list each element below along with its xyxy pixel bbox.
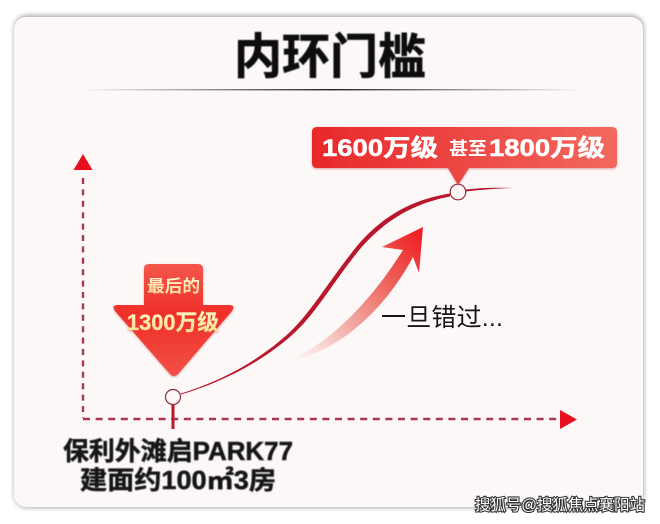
title: 内环门槛: [234, 31, 426, 84]
callout: price range: 1800万级: [489, 135, 605, 162]
title underline: [80, 89, 584, 90]
project label: [63, 438, 293, 495]
x axis arrow: [83, 410, 577, 429]
callout: down arrow starting price: 最后的: [147, 277, 200, 296]
peak point marker: [450, 184, 466, 200]
project label: 建面约100㎡3房: [80, 466, 276, 495]
rising arrow: [285, 227, 423, 361]
callout: price range: 甚至: [449, 139, 487, 159]
y axis arrow: [74, 154, 92, 418]
project label: 保利外滩启PARK77: [63, 438, 293, 466]
annotation text: 一旦错过...: [381, 304, 503, 332]
callout: down arrow starting price: 1300万级: [127, 310, 219, 335]
watermark: 搜狐号@搜狐焦点襄阳站: [475, 495, 645, 514]
callout: price range: [312, 127, 617, 185]
callout: down arrow starting price: [114, 264, 233, 376]
callout: price range: 1600万级: [322, 135, 438, 162]
growth curve: [181, 188, 512, 394]
start point marker: [166, 390, 180, 429]
